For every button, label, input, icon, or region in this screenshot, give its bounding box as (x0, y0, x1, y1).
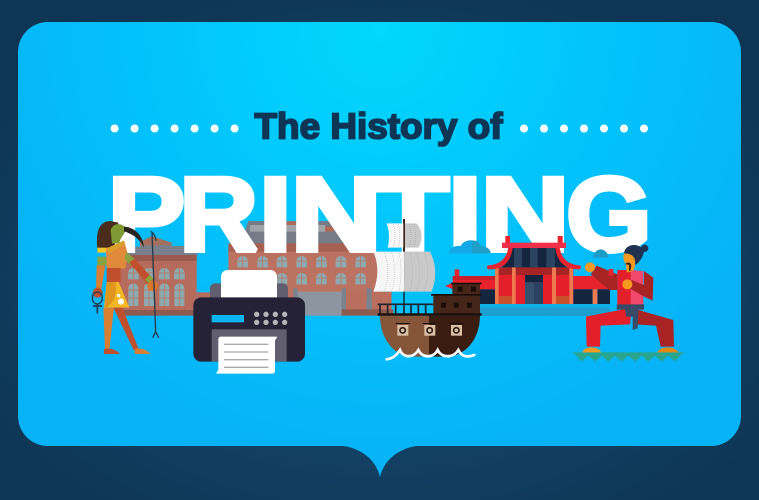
building: long factory (228, 221, 393, 316)
figure: Thoth with ankh and staff (92, 221, 159, 354)
title word: PRINTING: I (448, 156, 482, 273)
title word: PRINTING (112, 174, 648, 254)
title word: PRINTING: R (180, 155, 258, 273)
icon: printer (193, 270, 305, 374)
foreground left group (92, 221, 305, 374)
title word: PRINTING: G (566, 155, 651, 273)
title word: PRINTING: T (377, 155, 449, 273)
clouds (449, 240, 608, 258)
building: left hall (118, 236, 210, 316)
title word: PRINTING: P (108, 156, 185, 273)
title word: PRINTING: N (481, 157, 569, 274)
title word: PRINTING: N (291, 155, 382, 273)
title line: The History of: The History of (254, 106, 504, 147)
dots: right row (520, 124, 648, 132)
title word: PRINTING: I (259, 156, 291, 273)
building: red pagoda temple (445, 236, 610, 316)
dots: left row (111, 124, 239, 132)
figure: kung fu fighter (572, 245, 685, 362)
ship: sailing junk (373, 219, 482, 359)
